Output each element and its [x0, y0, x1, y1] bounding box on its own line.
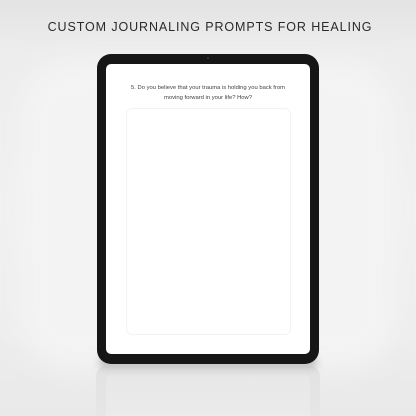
- answer box: [126, 108, 291, 335]
- prompt text: 5. Do you believe that your trauma is holding you back from: [131, 85, 285, 91]
- prompt text: moving forward in your life? How?: [164, 95, 252, 101]
- tablet: [97, 54, 319, 364]
- camera: [207, 57, 209, 59]
- screen: [106, 64, 310, 354]
- tablet frame: [97, 54, 319, 364]
- prompt text: [131, 85, 285, 101]
- background glow: [20, 60, 396, 370]
- tablet shadow: [100, 358, 316, 367]
- title: CUSTOM JOURNALING PROMPTS FOR HEALING: [48, 20, 372, 34]
- tablet reflection: [96, 366, 320, 416]
- tablet reflection screen: [106, 375, 310, 416]
